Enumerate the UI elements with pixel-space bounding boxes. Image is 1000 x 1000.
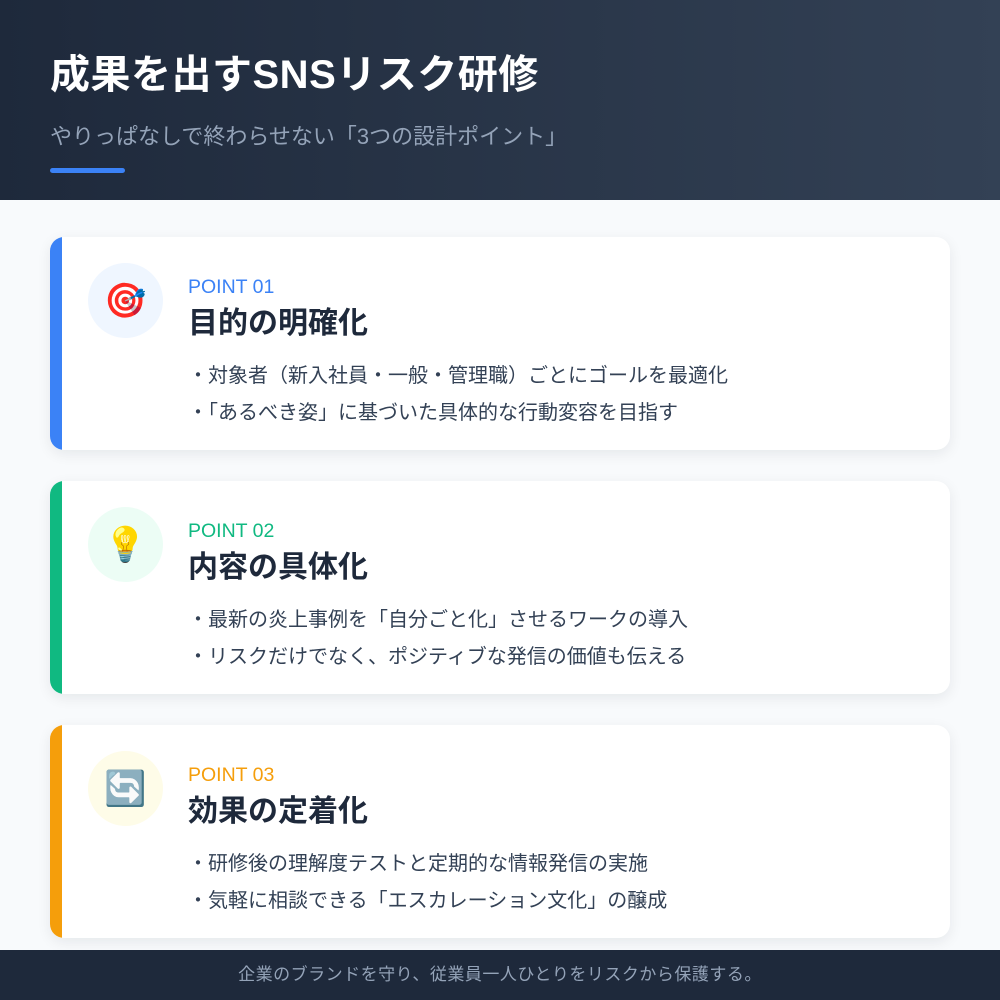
panel: point 02	[50, 481, 950, 694]
icon: target: 🎯	[104, 282, 147, 320]
heading: 目的の明確化	[188, 307, 368, 340]
subtitle: やりっぱなしで終わらせない「3つの設計ポイント」	[50, 124, 567, 149]
icon: cycle: 🔄	[104, 770, 147, 808]
bullet 1: ・研修後の理解度テストと定期的な情報発信の実施	[188, 853, 648, 875]
label: point 01: POINT 01	[188, 276, 274, 298]
bullet 1: ・対象者（新入社員・一般・管理職）ごとにゴールを最適化	[188, 365, 728, 387]
bullet 1: ・最新の炎上事例を「自分ごと化」させるワークの導入	[188, 609, 688, 631]
panel: point 03	[50, 725, 950, 938]
icon: bulb	[88, 507, 163, 582]
heading: 内容の具体化	[188, 551, 368, 584]
heading: 効果の定着化	[188, 795, 368, 828]
accent bar	[50, 168, 125, 173]
footer: 企業のブランドを守り、従業員一人ひとりをリスクから保護する。	[238, 965, 762, 984]
icon: cycle	[88, 751, 163, 826]
title: 成果を出すSNSリスク研修	[50, 53, 539, 97]
panel: point 01	[50, 237, 950, 450]
label: point 03: POINT 03	[188, 764, 274, 786]
icon: bulb: 💡	[104, 526, 147, 564]
bullet 2: ・リスクだけでなく、ポジティブな発信の価値も伝える	[188, 646, 686, 668]
label: point 02: POINT 02	[188, 520, 274, 542]
footer	[0, 950, 1000, 1000]
bullet 2: ・気軽に相談できる「エスカレーション文化」の醸成	[188, 890, 667, 912]
bullet 2: ・「あるべき姿」に基づいた具体的な行動変容を目指す	[188, 402, 678, 424]
header	[0, 0, 1000, 200]
icon: target	[88, 263, 163, 338]
